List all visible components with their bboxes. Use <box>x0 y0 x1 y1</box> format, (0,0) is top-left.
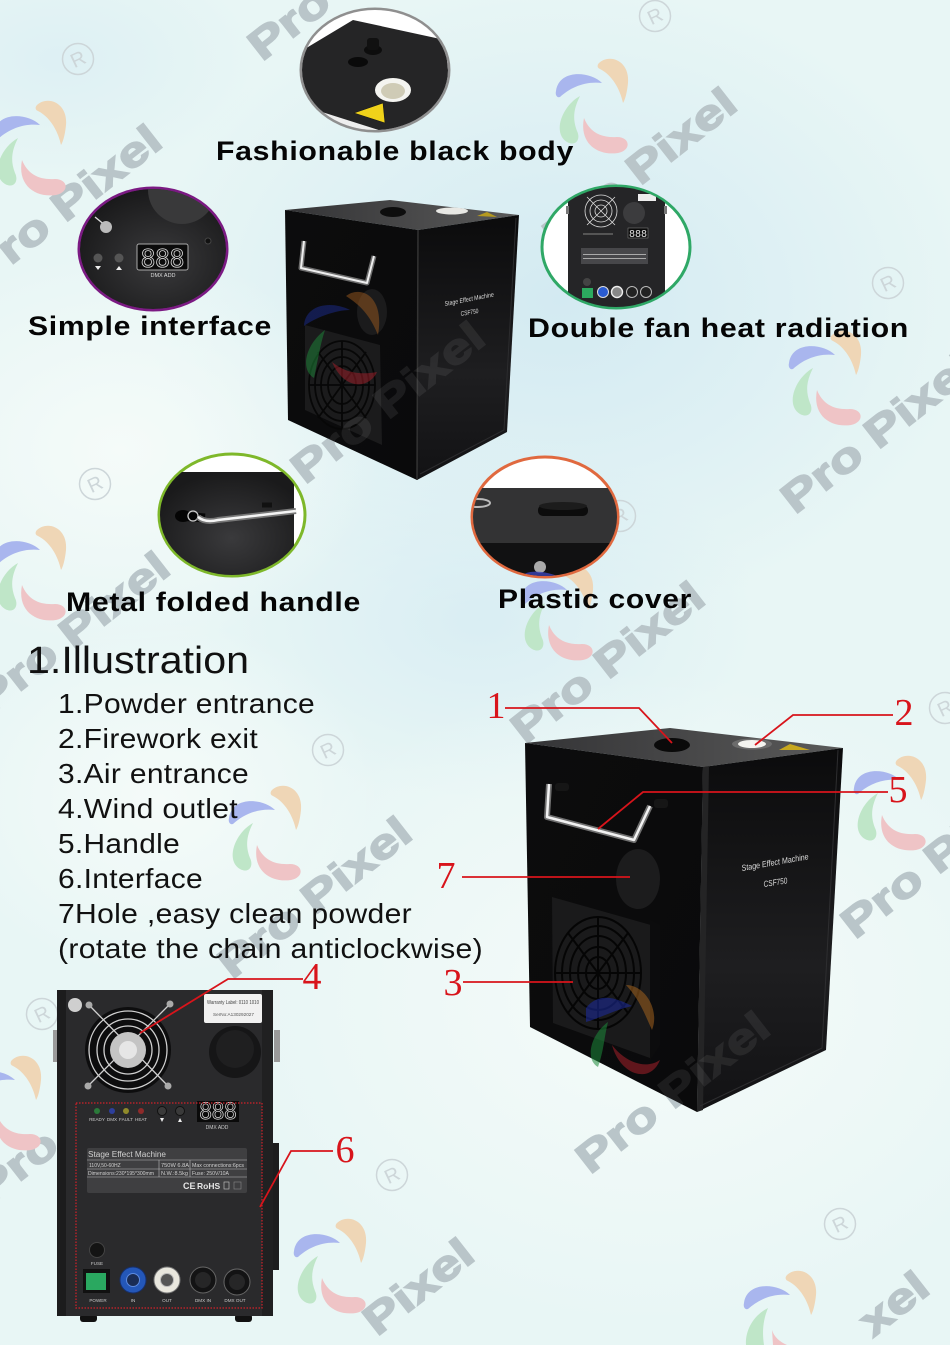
text block: parts list: 3.Air entrance <box>58 758 249 789</box>
watermark: Pro Pixel text: Pro Pixel <box>209 807 420 987</box>
heading: double fan heat radiation: Double fan heat radiation <box>528 313 909 343</box>
indicators: FAULT <box>119 1117 133 1122</box>
display: 888 <box>199 1100 237 1125</box>
specification plate: Fuse: 250V/10A <box>192 1171 230 1177</box>
annotation 2: firework exit: 2 <box>894 692 914 734</box>
annotation 1: powder entrance: 1 <box>486 685 506 727</box>
fan <box>68 998 174 1093</box>
power section <box>83 1242 110 1303</box>
text block: parts list <box>58 688 483 964</box>
annotation 4: wind outlet <box>140 956 322 1033</box>
annotation 1: powder entrance <box>486 685 672 743</box>
text block: parts list: 5.Handle <box>58 828 180 859</box>
specification plate: CE <box>183 1181 196 1191</box>
annotation 5: handle: 5 <box>888 769 908 811</box>
connectors <box>120 1267 250 1303</box>
interface dotted outline <box>76 1103 262 1308</box>
heading: plastic cover: Plastic cover <box>498 584 692 614</box>
callout: double fan heat radiation <box>542 186 690 311</box>
knob <box>209 1026 261 1078</box>
specification plate: 750W 6.8A <box>161 1163 190 1169</box>
indicators: HEAT <box>135 1117 147 1122</box>
watermark: Pro Pixel text: Pro Pixel <box>534 78 745 258</box>
specification plate: Max connections:6pcs <box>192 1163 245 1169</box>
power section: POWER <box>89 1298 107 1303</box>
text block: parts list: (rotate the chain anticlockwise) <box>58 933 483 964</box>
annotation 2: firework exit <box>755 692 914 745</box>
callout: simple interface: DMX ADD <box>150 273 176 279</box>
annotation 6: interface <box>260 1129 354 1207</box>
specification plate: Dimensions:230*195*300mm <box>88 1171 154 1177</box>
callout: metal folded handle <box>155 454 305 582</box>
watermark: Pro Pixel text: Pro Pixel <box>502 572 713 752</box>
machine label: Stage Effect Machine <box>741 851 810 873</box>
product photo: annotated machine: CSF750 <box>763 875 788 889</box>
annotation 5: handle <box>598 769 908 829</box>
text block: parts list: 2.Firework exit <box>58 723 258 754</box>
watermark: Pro Pixel text: Pro Pixel <box>567 1002 778 1182</box>
callout: simple interface: 888 <box>140 244 184 273</box>
text block: parts list: 1.Powder entrance <box>58 688 315 719</box>
fan plate <box>552 897 658 1058</box>
product photo: top machine: CSF750 <box>460 308 479 318</box>
callout: fashionable black body <box>300 8 450 132</box>
watermark: Pro Pixel text: Pixel <box>354 1229 483 1344</box>
powder hole cover <box>616 849 660 909</box>
connectors: DMX IN <box>195 1298 211 1303</box>
indicators <box>89 1106 184 1122</box>
specification plate: N.W.:8.5kg <box>161 1171 188 1177</box>
connectors: OUT <box>162 1298 172 1303</box>
product photo: annotated machine <box>525 728 843 1112</box>
handle <box>547 784 650 840</box>
product photo: top machine <box>282 200 519 492</box>
heading: fashionable black body: Fashionable black body <box>216 136 574 166</box>
watermark: Pro Pixel text: Pro Pixel <box>282 312 493 492</box>
product photo: rear control panel <box>53 990 280 1322</box>
power section: FUSE <box>91 1261 103 1266</box>
heading: simple interface: Simple interface <box>28 311 272 341</box>
indicators: READY <box>89 1117 105 1122</box>
specification plate: Stage Effect Machine <box>88 1150 167 1159</box>
specification plate <box>87 1148 247 1193</box>
product photo: top machine: Pro Pixel <box>282 312 493 492</box>
annotation 4: wind outlet: 4 <box>302 956 322 998</box>
watermark: Pro Pixel text: Pro Pixel <box>772 342 950 522</box>
warranty label <box>204 994 262 1023</box>
specification plate: RoHS <box>197 1181 220 1191</box>
text block: parts list: 6.Interface <box>58 863 203 894</box>
warranty label: SerNo:A130292027 <box>213 1012 255 1017</box>
indicators: DMX <box>107 1117 117 1122</box>
machine label: Stage Effect Machine <box>444 291 495 308</box>
text block: parts list: 7Hole ,easy clean powder <box>58 898 412 929</box>
fan plate <box>305 325 382 445</box>
callout: simple interface <box>78 186 228 312</box>
logo overlay <box>586 985 660 1074</box>
heading: metal folded handle: Metal folded handle <box>66 587 361 617</box>
handle <box>301 241 374 283</box>
product photo: annotated machine: Pro Pixel <box>567 1002 778 1182</box>
warranty label: Warranty Label: 0110 1010 <box>207 1000 259 1006</box>
annotation 3: air entrance <box>444 962 573 1004</box>
annotation 7: hole: 7 <box>436 855 456 897</box>
annotation 6: interface: 6 <box>336 1129 354 1171</box>
watermark: Pro Pixel text: xel <box>850 1262 938 1345</box>
specification plate: 110V,50-60HZ <box>89 1163 121 1169</box>
connectors: DMX OUT <box>224 1298 246 1303</box>
text block: parts list: 4.Wind outlet <box>58 793 238 824</box>
connectors: IN <box>131 1298 135 1303</box>
logo overlay <box>304 292 379 384</box>
callout: double fan heat radiation: 888 <box>629 229 647 240</box>
annotation 3: air entrance: 3 <box>444 962 462 1004</box>
callout: plastic cover <box>466 457 620 583</box>
heading: illustration: 1.Illustration <box>27 640 249 682</box>
display: DMX ADD <box>206 1125 229 1131</box>
